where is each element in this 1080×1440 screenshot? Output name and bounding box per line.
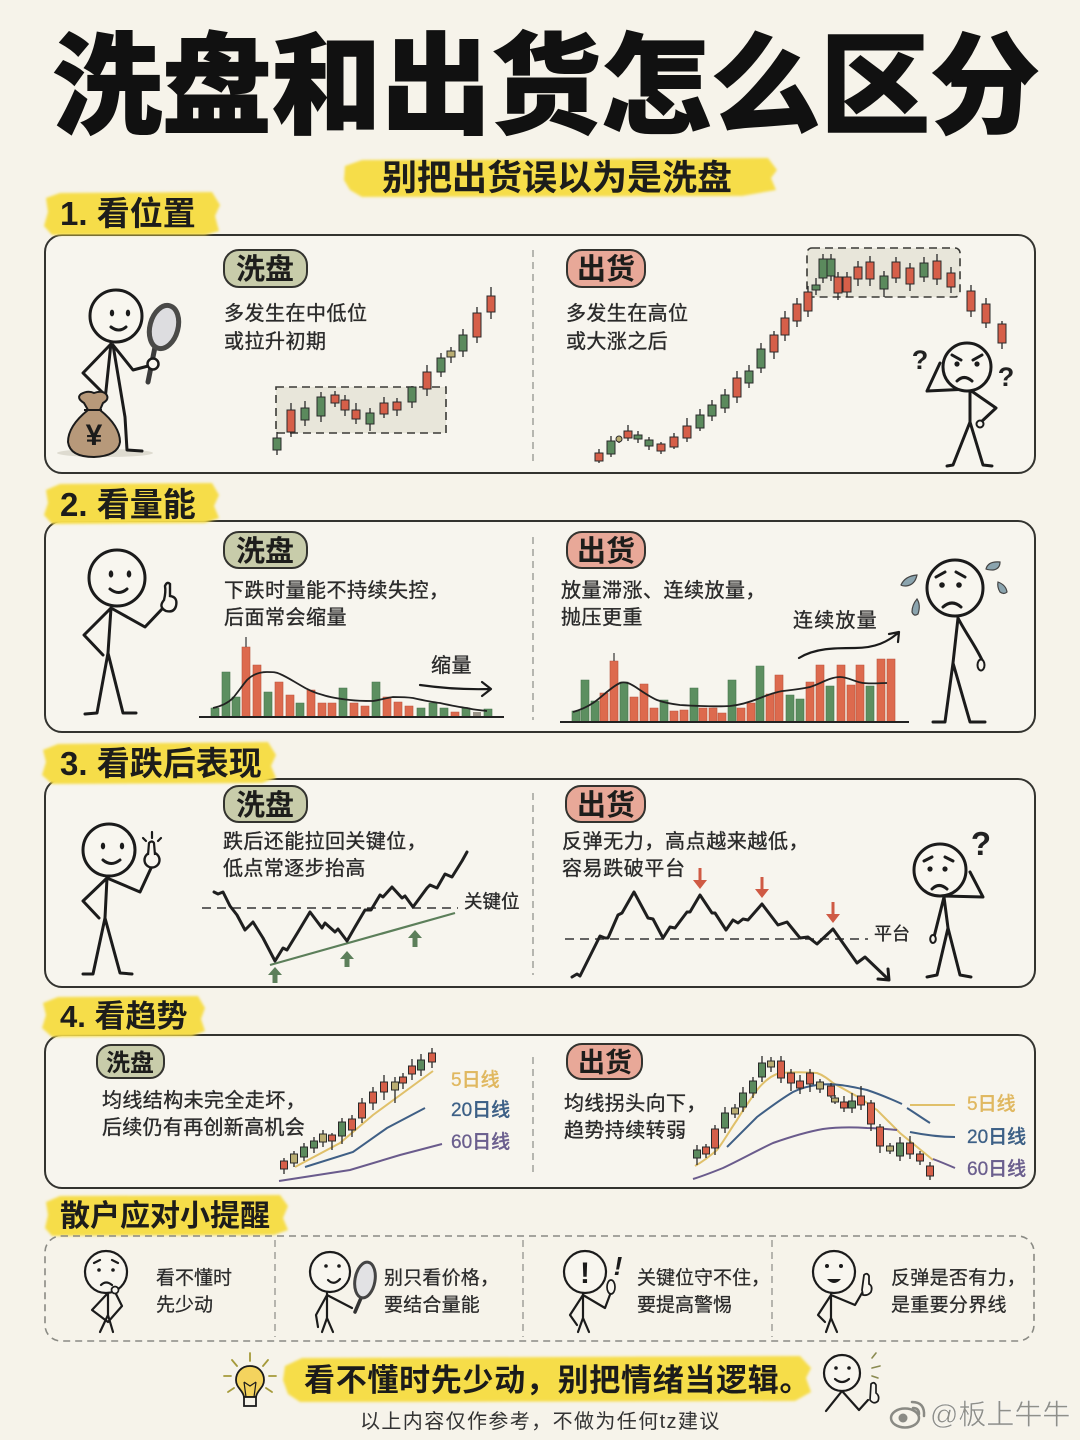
text xyxy=(891,1267,1026,1316)
footer disclaimer: 以上内容仅作参考，不做为任何tz建议 xyxy=(360,1410,721,1433)
icon: stick man with magnifier xyxy=(310,1252,378,1332)
volume chart: continuous heavy volume xyxy=(560,653,909,722)
callout: closing reminder xyxy=(224,1353,880,1411)
text: 洗盘 trend xyxy=(102,1089,306,1139)
badge: 洗盘: 洗盘 xyxy=(236,253,294,286)
text: 是重要分界线 xyxy=(891,1294,1007,1316)
line chart: lower highs break platform: 平台 xyxy=(874,924,910,944)
figure: stick man with magnifier and money bag: ¥ xyxy=(86,419,103,452)
text: 看不懂时 xyxy=(156,1267,232,1289)
legend: moving averages (washout) xyxy=(451,1069,510,1153)
heading: 散户应对小提醒: 散户应对小提醒 xyxy=(60,1200,270,1233)
candlestick chart: uptrend with moving averages xyxy=(279,1048,442,1181)
line chart: rising lows around key level xyxy=(202,852,520,983)
badge: 洗盘 xyxy=(224,250,307,287)
panel: 1 看位置 xyxy=(45,235,1035,473)
legend: moving averages (distribution): 20日线 xyxy=(967,1126,1026,1148)
text: 出货 trend: 均线拐头向下， xyxy=(564,1092,707,1115)
text: 洗盘 after-drop behaviour: 低点常逐步抬高 xyxy=(223,857,366,880)
panel: 3 看跌后表现 xyxy=(45,779,1035,987)
icon: light bulb xyxy=(224,1353,276,1406)
panel: 2 看量能 xyxy=(45,521,1035,732)
legend: moving averages (washout): 60日线 xyxy=(451,1131,510,1153)
text: 洗盘 position xyxy=(224,302,368,353)
legend: moving averages (washout): 5日线 xyxy=(451,1069,500,1091)
badge: 出货 xyxy=(567,250,645,287)
badge: 出货: 出货 xyxy=(577,789,635,822)
figure: sweating worried stick man xyxy=(901,560,1007,722)
text: 出货 volume xyxy=(561,579,766,629)
text: 洗盘 position: 或拉升初期 xyxy=(224,330,326,353)
icon: stick man with exclamation mark: ! xyxy=(614,1251,623,1281)
label with arrow: 连续放量 xyxy=(793,609,899,658)
text: 洗盘 position: 多发生在中低位 xyxy=(224,302,368,325)
heading: 4 看趋势: 4. 看趋势 xyxy=(60,999,187,1034)
text: 出货 volume: 抛压更重 xyxy=(561,606,643,629)
badge: 出货: 出货 xyxy=(577,253,635,286)
text: 洗盘 volume: 下跌时量能不持续失控， xyxy=(224,579,450,602)
legend: moving averages (distribution): 5日线 xyxy=(967,1093,1016,1115)
candlestick chart: high-position distribution xyxy=(595,248,1006,463)
heading: 2 看量能: 2. 看量能 xyxy=(60,486,196,523)
text: 出货 position: 或大涨之后 xyxy=(566,330,668,353)
candlestick chart: low-position washout xyxy=(273,287,495,455)
text: 出货 position xyxy=(566,302,688,353)
text: 洗盘 trend: 后续仍有再创新高机会 xyxy=(102,1116,305,1139)
icon: stick man thumbs up xyxy=(824,1353,880,1411)
badge: 出货 xyxy=(567,1044,642,1079)
text: 出货 after-drop behaviour: 容易跌破平台 xyxy=(562,857,686,880)
volume chart: shrinking volume xyxy=(199,637,504,717)
text: 洗盘 after-drop behaviour: 跌后还能拉回关键位， xyxy=(223,830,427,853)
text xyxy=(156,1267,232,1316)
badge: 洗盘: 洗盘 xyxy=(236,789,294,822)
line chart: lower highs break platform xyxy=(565,868,910,980)
text: 出货 trend: 趋势持续转弱 xyxy=(564,1119,686,1142)
text: 出货 position: 多发生在高位 xyxy=(566,302,688,325)
text: 先少动 xyxy=(156,1294,213,1316)
badge: 洗盘 xyxy=(97,1045,164,1078)
badge: 出货: 出货 xyxy=(578,1048,632,1078)
text: 出货 volume: 放量滞涨、连续放量， xyxy=(561,579,766,602)
tip 1 xyxy=(85,1251,232,1332)
text: 出货 after-drop behaviour xyxy=(562,830,809,880)
subtitle with yellow highlight: 别把出货误以为是洗盘 xyxy=(382,159,732,198)
text: 出货 trend xyxy=(564,1092,707,1142)
tip 4 xyxy=(813,1251,1026,1332)
heading: 4 看趋势 xyxy=(42,996,205,1037)
heading: 1 看位置: 1. 看位置 xyxy=(60,195,196,232)
figure: stick man with magnifier and money bag xyxy=(57,290,183,457)
figure: confused angry stick man xyxy=(912,343,1014,466)
text: 别只看价格， xyxy=(384,1267,499,1289)
figure: worried stick man with question mark xyxy=(914,825,991,977)
text: 要结合量能 xyxy=(384,1294,480,1316)
icon: smiling stick man with thumb up xyxy=(813,1251,872,1332)
text: 反弹是否有力， xyxy=(891,1267,1026,1289)
badge: 洗盘 xyxy=(224,786,307,822)
line chart: rising lows around key level: 关键位 xyxy=(464,891,520,912)
figure: worried stick man with question mark: ? xyxy=(971,825,991,862)
figure: confused angry stick man: ? xyxy=(998,362,1014,392)
label with arrow: 缩量 xyxy=(420,654,491,696)
badge: 洗盘: 洗盘 xyxy=(106,1050,154,1077)
text: 洗盘 volume xyxy=(224,579,450,629)
heading: 散户应对小提醒 xyxy=(45,1195,288,1236)
figure: thumbs up stick man xyxy=(84,550,176,714)
text: 洗盘 volume: 后面常会缩量 xyxy=(224,606,347,629)
figure: confused angry stick man: ? xyxy=(912,345,928,375)
legend: moving averages (distribution) xyxy=(967,1093,1026,1180)
icon: stick man with exclamation mark: ! xyxy=(580,1257,590,1290)
title: 洗盘和出货怎么区分 xyxy=(52,26,1040,149)
badge: 洗盘 xyxy=(224,532,307,568)
text xyxy=(637,1267,770,1316)
legend: moving averages (washout): 20日线 xyxy=(451,1099,510,1121)
heading: 3 看跌后表现: 3. 看跌后表现 xyxy=(60,745,262,782)
legend: moving averages (distribution): 60日线 xyxy=(967,1158,1026,1180)
candlestick chart: downtrend with moving averages xyxy=(693,1056,955,1180)
watermark: weibo: @板上牛牛 xyxy=(930,1399,1070,1430)
panel: tips for retail investors xyxy=(45,1236,1034,1341)
text: 洗盘 after-drop behaviour xyxy=(223,830,427,880)
text: 要提高警惕 xyxy=(637,1294,732,1316)
label with arrow: 缩量: 缩量 xyxy=(431,654,472,677)
text: 出货 after-drop behaviour: 反弹无力，高点越来越低， xyxy=(562,830,809,853)
highlighted sentence: 看不懂时先少动，别把情绪当逻辑。 xyxy=(304,1363,811,1398)
label with arrow: 连续放量: 连续放量 xyxy=(793,609,878,632)
figure: finger pointing up stick man xyxy=(83,824,161,974)
panel: 4 看趋势 xyxy=(45,1035,1035,1188)
badge: 出货 xyxy=(566,786,645,822)
text: 洗盘 trend: 均线结构未完全走坏， xyxy=(102,1089,306,1112)
icon: puzzled stick man xyxy=(85,1251,127,1332)
text: 关键位守不住， xyxy=(637,1267,770,1289)
badge: 出货 xyxy=(567,532,645,568)
tip 2 xyxy=(310,1252,499,1332)
badge: 洗盘: 洗盘 xyxy=(236,535,294,568)
badge: 出货: 出货 xyxy=(577,535,635,568)
tip 3 xyxy=(564,1251,770,1332)
heading: 1 看位置 xyxy=(44,192,220,235)
heading: 2 看量能 xyxy=(44,483,219,524)
icon: stick man with exclamation mark xyxy=(564,1251,623,1332)
text xyxy=(384,1267,499,1316)
